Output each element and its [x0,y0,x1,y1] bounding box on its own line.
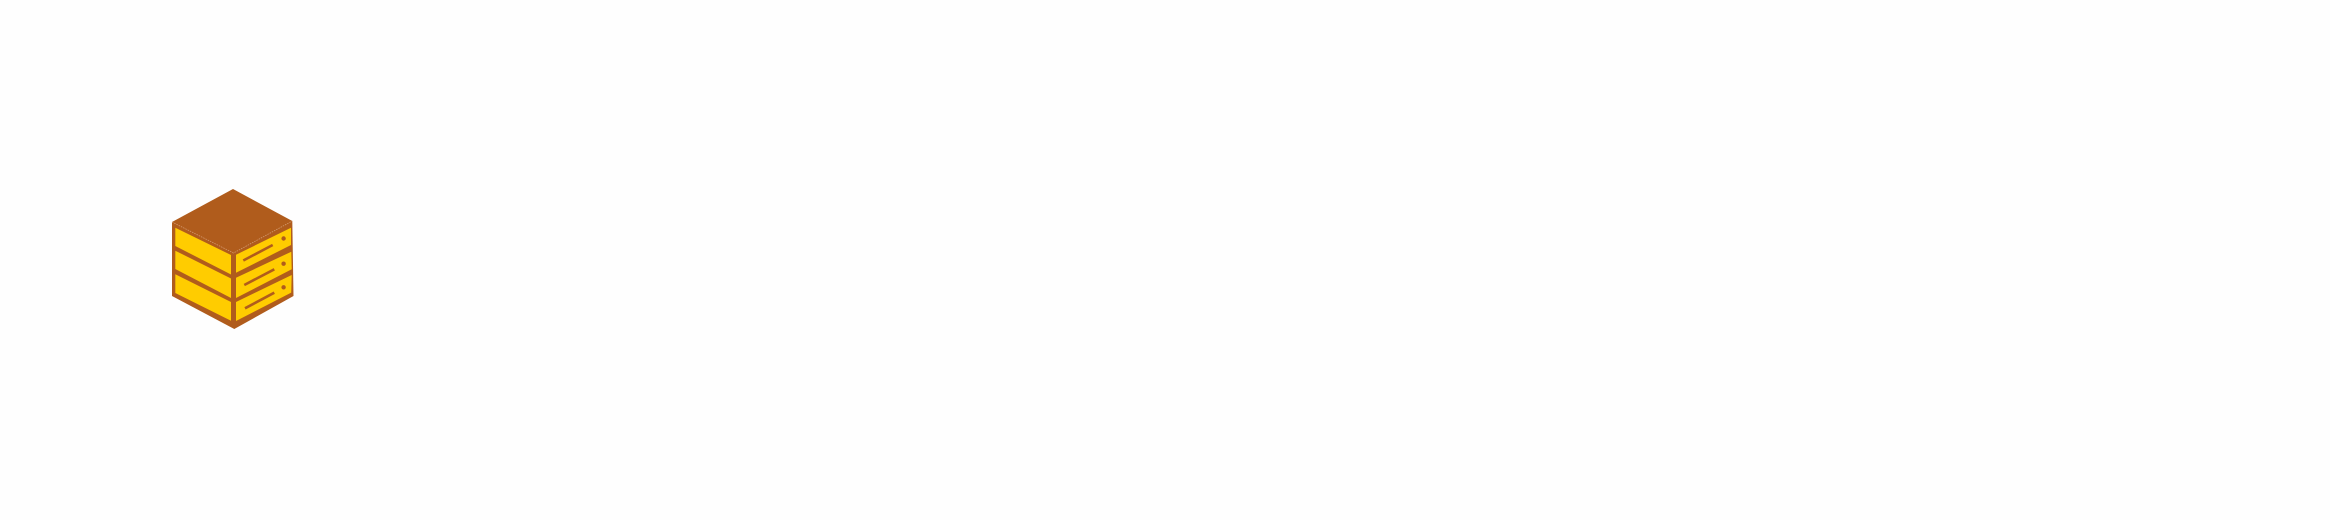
drawer handles [243,245,274,308]
icon: server stack [172,189,294,329]
cube body [172,189,294,329]
left face drawers [175,228,231,321]
right face drawers [236,228,292,321]
top face edge highlight [172,221,292,253]
drawer indicator lights [281,236,286,289]
